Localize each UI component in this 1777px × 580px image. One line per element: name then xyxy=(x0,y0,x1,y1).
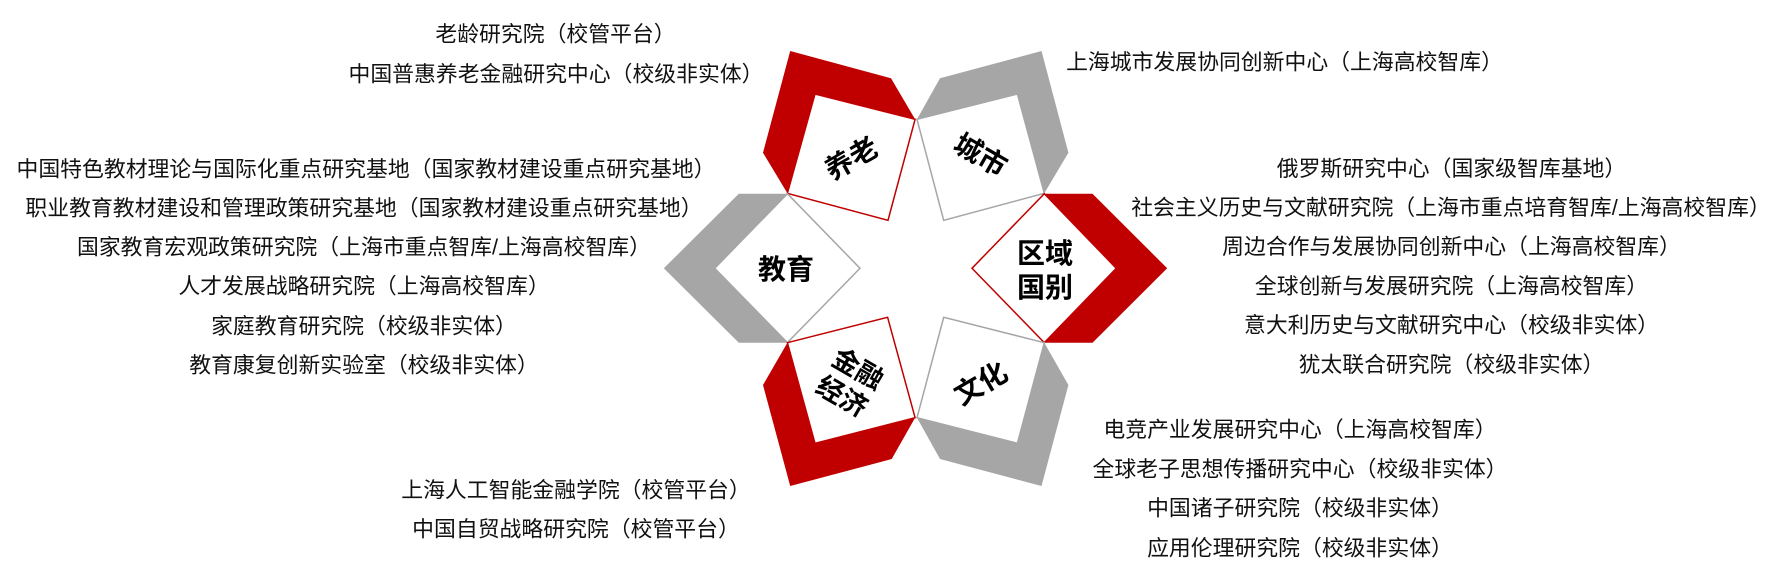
text block: 养老 institutes: 老龄研究院（校管平台） xyxy=(435,22,676,46)
label: 金融经济: 经济 xyxy=(811,370,873,423)
text block: 教育 institutes xyxy=(16,156,716,378)
square: 文化 xyxy=(917,317,1044,443)
label: 教育: 教育 xyxy=(758,254,814,285)
text block: 养老 institutes: 中国普惠养老金融研究中心（校级非实体） xyxy=(348,62,764,86)
label: 区域国别: 国别 xyxy=(1017,272,1073,303)
label: 金融经济: 金融 xyxy=(827,343,889,396)
text block: 文化 institutes xyxy=(1092,417,1508,560)
square: 教育 xyxy=(715,194,860,343)
text block: 教育 institutes: 中国特色教材理论与国际化重点研究基地（国家教材建设重点研究基地） xyxy=(16,156,716,182)
text block: 文化 institutes: 应用伦理研究院（校级非实体） xyxy=(1147,536,1453,560)
panel: 养老 xyxy=(763,51,915,220)
text block: 教育 institutes: 教育康复创新实验室（校级非实体） xyxy=(189,352,539,378)
label: 养老: 养老 xyxy=(820,131,884,186)
label: 区域国别: 区域 xyxy=(1017,238,1073,269)
text block: 养老 institutes xyxy=(348,22,764,86)
text block: 区域国别 institutes: 犹太联合研究院（校级非实体） xyxy=(1299,352,1604,377)
text block: 教育 institutes: 职业教育教材建设和管理政策研究基地（国家教材建设重点研究基地） xyxy=(25,196,703,220)
panel: 文化 xyxy=(917,317,1068,486)
panel: 城市 xyxy=(917,51,1068,220)
text block: 区域国别 institutes: 全球创新与发展研究院（上海高校智库） xyxy=(1255,274,1648,298)
square: 区域国别 xyxy=(972,194,1116,343)
arrow shape: 文化 gray xyxy=(917,317,1068,486)
text block: 区域国别 institutes: 周边合作与发展协同创新中心（上海高校智库） xyxy=(1222,234,1681,259)
arrow shape: 金融经济 red xyxy=(763,317,915,486)
text block: 金融经济 institutes: 上海人工智能金融学院（校管平台） xyxy=(401,478,751,502)
arrow shape: 教育 gray xyxy=(664,194,860,343)
text block: 区域国别 institutes: 俄罗斯研究中心（国家级智库基地） xyxy=(1277,156,1626,181)
text block: 金融经济 institutes xyxy=(401,478,751,542)
square: 养老 xyxy=(787,94,915,220)
arrow shape: 区域国别 red xyxy=(972,194,1167,343)
text block: 区域国别 institutes: 意大利历史与文献研究中心（校级非实体） xyxy=(1244,312,1659,338)
text block: 文化 institutes: 电竞产业发展研究中心（上海高校智库） xyxy=(1103,417,1497,442)
text block: 教育 institutes: 家庭教育研究院（校级非实体） xyxy=(211,314,517,338)
text block: 区域国别 institutes: 社会主义历史与文献研究院（上海市重点培育智库/上海高校智库） xyxy=(1131,195,1771,220)
text block: 城市 institutes: 上海城市发展协同创新中心（上海高校智库） xyxy=(1066,50,1503,74)
text block: 区域国别 institutes xyxy=(1131,156,1771,377)
square: 城市 xyxy=(917,94,1044,220)
text block: 教育 institutes: 人才发展战略研究院（上海高校智库） xyxy=(178,274,550,298)
text block: 文化 institutes: 全球老子思想传播研究中心（校级非实体） xyxy=(1092,456,1508,482)
text block: 文化 institutes: 中国诸子研究院（校级非实体） xyxy=(1147,496,1453,520)
panel: 金融经济 xyxy=(763,317,915,486)
arrow shape: 养老 red xyxy=(763,51,915,220)
panel: 区域国别 xyxy=(972,194,1167,343)
label: 城市: 城市 xyxy=(948,128,1012,183)
panel: 教育 xyxy=(664,194,860,343)
label: 文化: 文化 xyxy=(949,356,1013,411)
text block: 教育 institutes: 国家教育宏观政策研究院（上海市重点智库/上海高校智库） xyxy=(77,234,651,260)
square: 金融经济 xyxy=(787,317,915,443)
arrow shape: 城市 gray xyxy=(917,51,1068,220)
text block: 金融经济 institutes: 中国自贸战略研究院（校管平台） xyxy=(412,516,740,542)
